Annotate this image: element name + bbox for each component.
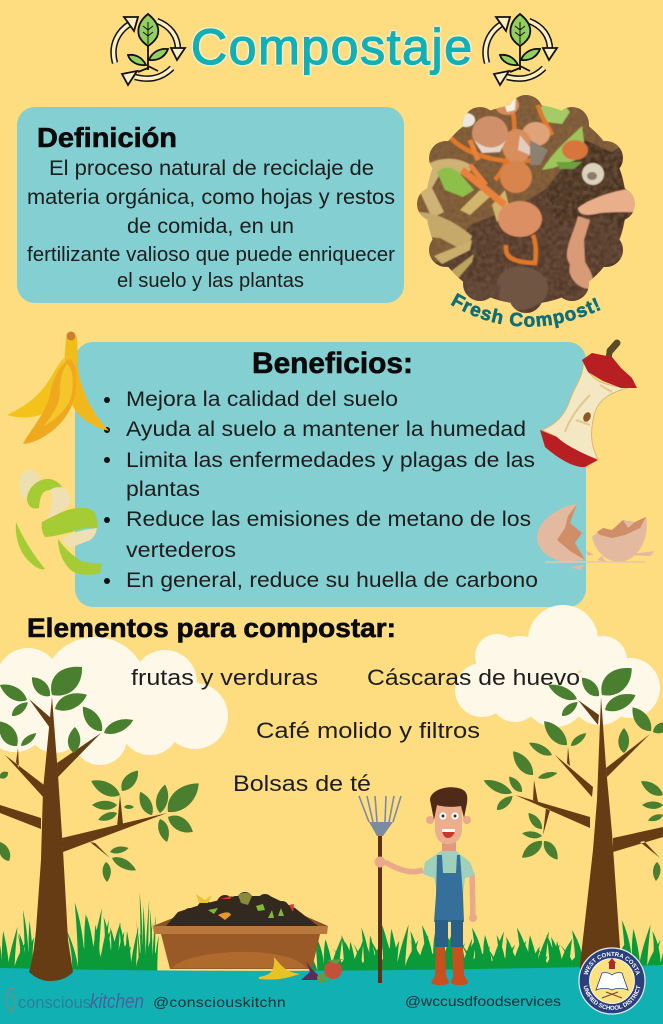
list: benefits [104,388,538,592]
icon: egg shells [537,504,655,570]
text block: definition: fertilizante valioso que puede enriquecer [27,244,395,266]
panel: benefits [75,342,586,607]
heading: elements to compost: Elementos para compostar: [27,613,396,643]
ground [0,965,663,1024]
heading: definition: Definición [37,122,177,153]
icon: left compost cycle [114,14,185,85]
text block: definition [27,157,395,292]
list: benefits: Ayuda al suelo a mantener la humedad [126,418,526,441]
text block: elements: frutas y verduras [131,665,318,690]
text block: definition: de comida, en un [127,215,294,238]
text block: elements [131,665,580,796]
logo: conscious kitchen: kitchen [90,991,144,1013]
list: benefits: Limita las enfermedades y plagas de las [126,449,535,472]
list: benefits: Mejora la calidad del suelo [126,388,398,411]
text block: elements: Café molido y filtros [256,718,480,743]
caption: fresh compost: Fresh Compost! [450,292,600,328]
peels [420,159,472,218]
list: benefits: vertederos [126,539,236,562]
icon: apple core [540,343,637,467]
rake [359,796,401,983]
icon: carrot [6,988,15,1012]
grass [0,892,663,975]
icon: apple peel [16,470,102,575]
handle: conscious kitchen: @consciouskitchn [153,994,286,1010]
cloud: right [455,605,660,727]
cloud: left [0,637,228,765]
text block: definition: el suelo y las plantas [117,270,304,292]
logo: west contra costa school district: UNIFIED SCHOOL DISTRICT [584,985,640,1010]
list: benefits: Reduce las emisiones de metano de los [126,508,531,531]
photo: fresh compost [417,95,635,313]
food scraps [259,957,343,983]
list: benefits: En general, reduce su huella de carbono [126,569,538,592]
icon: banana peel [7,332,109,444]
list: benefits: plantas [126,478,200,501]
logo: west contra costa school district [578,947,646,1015]
tree: right [482,660,663,985]
title: Compostaje [191,19,472,75]
farmer with rake [359,787,477,985]
eggshells [522,122,550,146]
text block: definition: materia orgánica, como hojas y restos [27,186,395,209]
logo: west contra costa school district: WEST CONTRA COSTA [584,952,640,976]
text block: elements: Bolsas de té [233,771,371,796]
compost bin [153,892,328,969]
icon: right compost cycle [486,14,557,85]
hand [578,187,640,215]
logo: conscious kitchen: conscious [18,993,91,1012]
handle: food services: @wccusdfoodservices [405,993,561,1009]
text block: definition: El proceso natural de reciclaje de [49,157,374,180]
heading: benefits: Beneficios: [252,347,413,380]
panel: definition [17,107,404,303]
carrots [448,105,552,263]
text block: elements: Cáscaras de huevo [367,665,580,690]
lettuce [437,168,474,197]
farmer [374,787,477,985]
tree: left [0,658,205,981]
logo: conscious kitchen [6,988,144,1013]
